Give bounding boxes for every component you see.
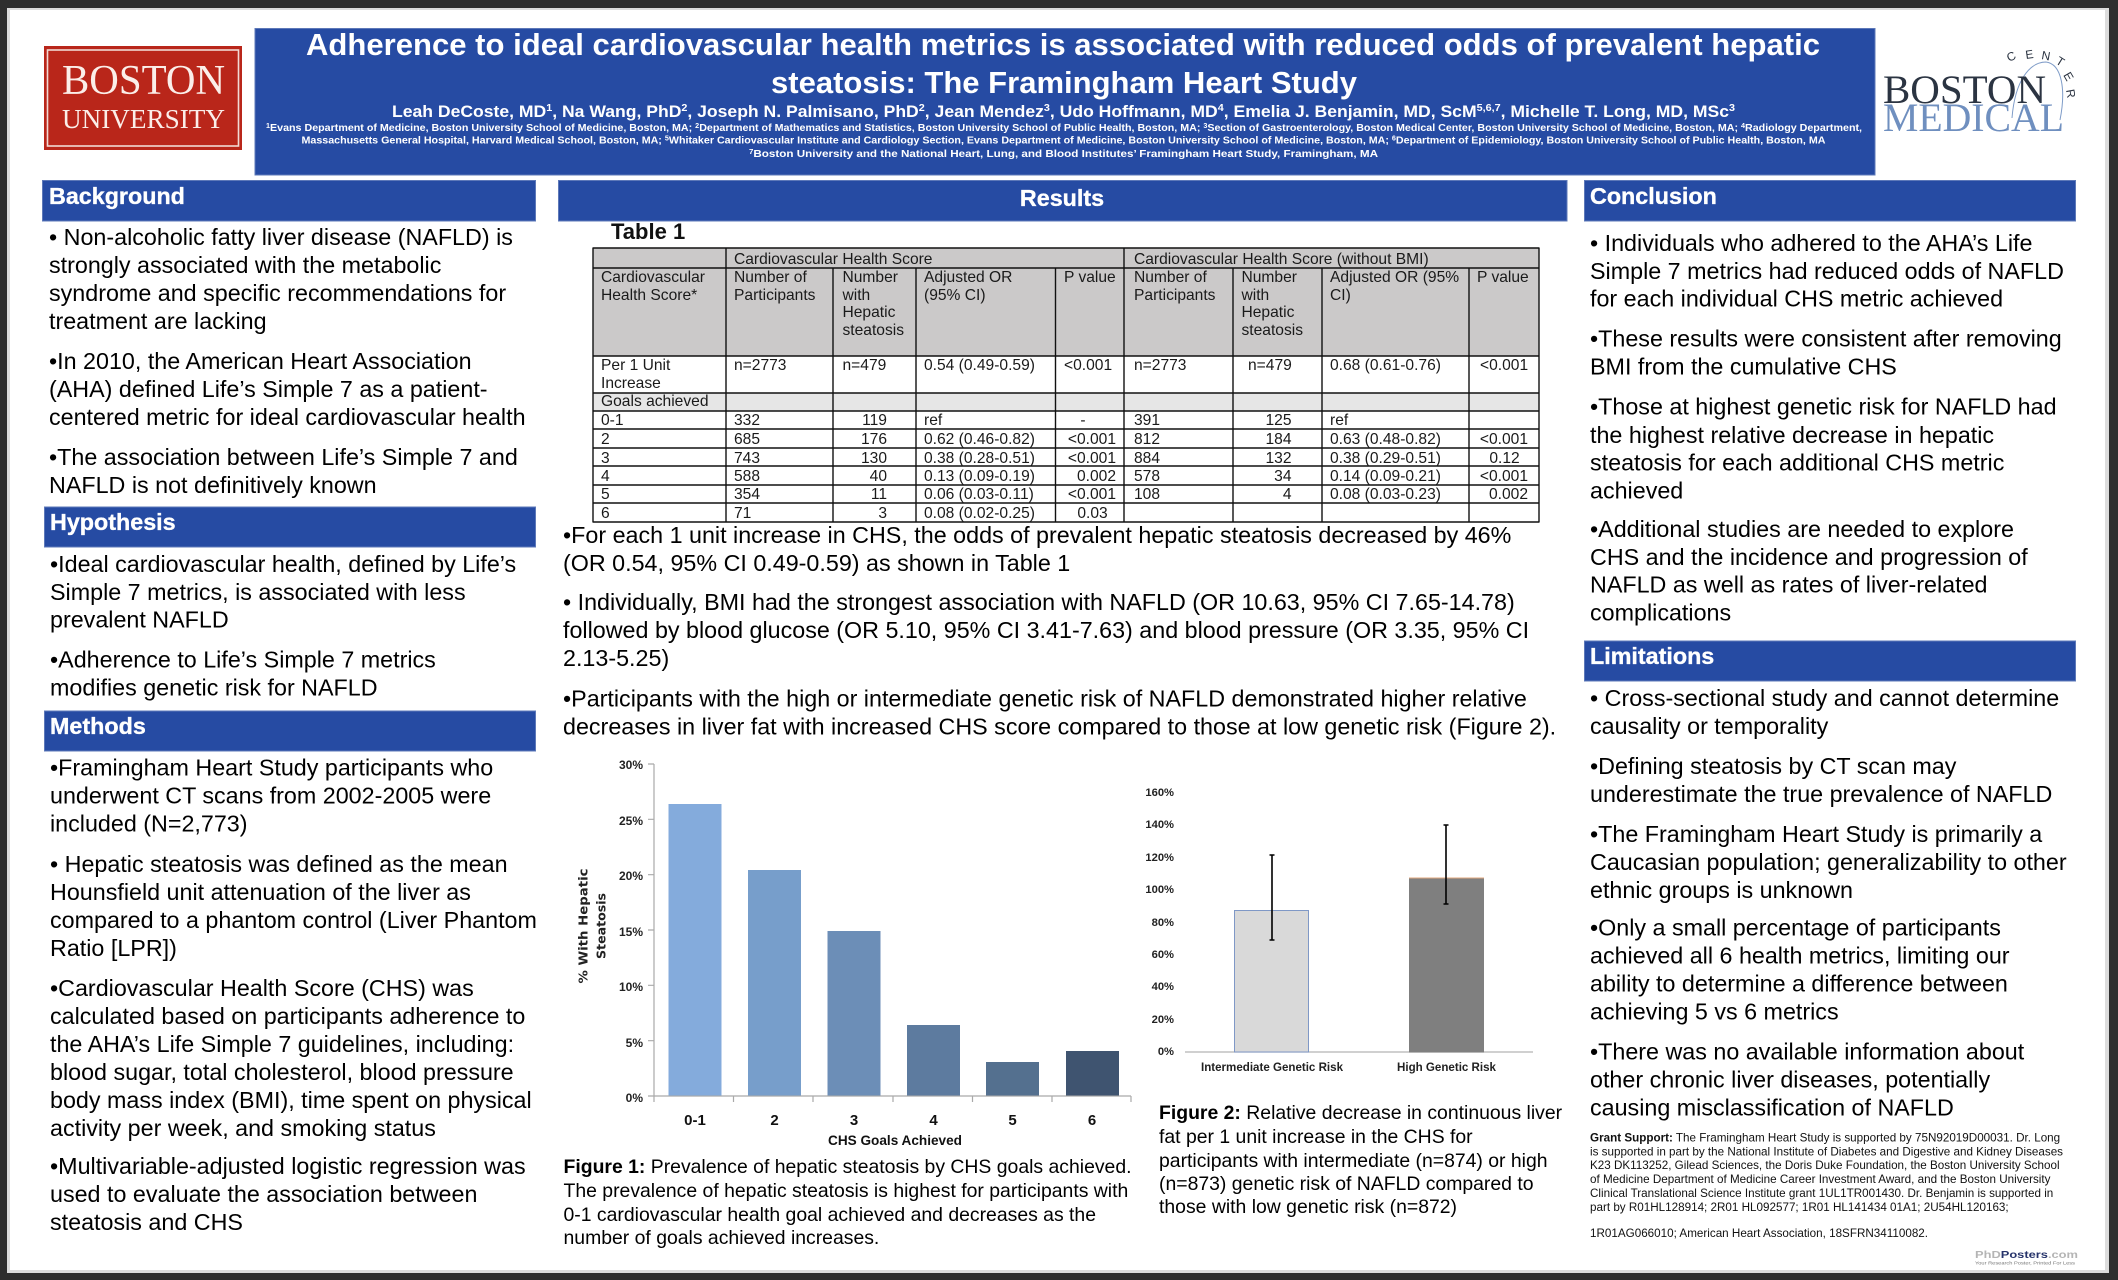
text block: results bullets: followed by blood glucose (OR 5.10, 95% CI 3.41-7.63) and blood pressure (OR 3.35, 95% CI — [563, 617, 1529, 643]
bar chart: figure 1: 2 — [770, 1112, 779, 1129]
table 1: Participants — [734, 287, 816, 304]
table 1: 0.54 (0.49-0.59) — [924, 357, 1035, 374]
text block: results bullets: 2.13-5.25) — [563, 645, 669, 671]
logo: Boston Medical Center — [1883, 47, 2078, 140]
text block: conclusion bullets: CHS and the incidence and progression of — [1590, 544, 2028, 570]
table 1: <0.001 — [1480, 431, 1528, 448]
table 1: 0.38 (0.28-0.51) — [924, 450, 1035, 467]
text block: conclusion bullets: •Those at highest genetic risk for NAFLD had — [1590, 394, 2057, 420]
text block: conclusion bullets: •These results were consistent after removing — [1590, 326, 2062, 352]
heading: hypothesis: Hypothesis — [50, 509, 176, 535]
panel: conclusion — [1584, 180, 2076, 626]
text block: conclusion bullets: the highest relative decrease in hepatic — [1590, 422, 1994, 448]
table 1: 743 — [734, 450, 760, 467]
text block: conclusion bullets: for each individual CHS metric achieved — [1590, 286, 2003, 312]
caption: figure 2: participants with intermediate (n=874) or high — [1159, 1150, 1548, 1172]
table 1: 176 — [861, 431, 887, 448]
table 1: <0.001 — [1068, 486, 1116, 503]
table 1: 0.08 (0.02-0.25) — [924, 505, 1035, 522]
text block: background bullets: • Non-alcoholic fatty liver disease (NAFLD) is — [49, 224, 513, 250]
caption: figure 1: 0-1 cardiovascular health goal achieved and decreases as the — [564, 1204, 1096, 1226]
logo: Boston Medical Center: CENTER — [2004, 47, 2078, 99]
affiliations: 6 — [1392, 136, 1396, 142]
caption: figure 1: The prevalence of hepatic steatosis is highest for participants with — [564, 1180, 1128, 1202]
text block: methods bullets: underwent CT scans from 2002-2005 were — [50, 782, 491, 808]
bar chart: figure 2: 140% — [1145, 819, 1174, 831]
text block: grant support: Grant Support: The Framingham Heart Study is supported by 75N92019D00031. Dr. Long — [1590, 1132, 2060, 1144]
authors: 3 — [1044, 103, 1050, 114]
text block: background bullets: treatment are lacking — [49, 308, 267, 334]
text block: background bullets: strongly associated with the metabolic — [49, 252, 442, 278]
table 1: with — [842, 287, 870, 304]
table 1: 184 — [1265, 431, 1292, 448]
logo: Boston Medical Center: BOSTON — [1883, 67, 2046, 112]
authors: 2 — [919, 103, 925, 114]
table 1: P value — [1477, 269, 1529, 286]
caption: figure 1 — [564, 1156, 1132, 1249]
heading: methods — [44, 711, 536, 751]
panel: results — [558, 180, 1567, 1249]
authors: Leah DeCoste, MD — [392, 103, 535, 121]
table 1: 0.002 — [1489, 486, 1528, 503]
text block: background bullets: syndrome and specific recommendations for — [49, 280, 506, 306]
heading: background — [42, 180, 536, 221]
text block: methods bullets: steatosis and CHS — [50, 1209, 243, 1235]
affiliations: Evans Department of Medicine, Boston University School of Medicine, Boston, MA; — [270, 123, 695, 134]
text block: results bullets — [563, 522, 1556, 740]
caption: figure 2: (n=873) genetic risk of NAFLD compared to — [1159, 1173, 1534, 1195]
table 1 — [592, 248, 1540, 522]
table 1: Number — [1242, 269, 1297, 286]
table 1: 588 — [734, 468, 760, 485]
table 1: Hepatic — [842, 304, 896, 321]
table 1: 0.62 (0.46-0.82) — [924, 431, 1035, 448]
table 1: 0.08 (0.03-0.23) — [1330, 486, 1441, 503]
table 1: steatosis — [1242, 322, 1303, 339]
text block: conclusion bullets: Simple 7 metrics had reduced odds of NAFLD — [1590, 258, 2064, 284]
bar chart: figure 2: 120% — [1145, 852, 1174, 864]
heading: results — [558, 180, 1567, 221]
table 1: 332 — [734, 412, 760, 429]
text block: background bullets — [49, 224, 526, 498]
table 1: <0.001 — [1480, 357, 1528, 374]
authors: 3 — [1729, 103, 1735, 114]
bar chart: figure 1: % With Hepatic — [576, 868, 590, 984]
heading: conclusion: Conclusion — [1590, 183, 1717, 209]
table 1: 0.13 (0.09-0.19) — [924, 468, 1035, 485]
text block: limitations bullets: •Only a small percentage of participants — [1590, 914, 2001, 940]
table 1: CI) — [1330, 287, 1351, 304]
text block: methods bullets: used to evaluate the association between — [50, 1181, 477, 1207]
bar chart: figure 2: 20% — [1152, 1014, 1174, 1026]
table 1: 391 — [1134, 412, 1160, 429]
caption: figure 2: those with low genetic risk (n=872) — [1159, 1196, 1457, 1218]
table 1: with — [1240, 287, 1269, 304]
table 1: 119 — [862, 412, 887, 429]
logo: PhDPosters: PhD Posters .com — [1975, 1250, 2078, 1261]
affiliations: 3 — [1203, 123, 1207, 130]
heading: background: Background — [49, 183, 185, 209]
table 1: 0.14 (0.09-0.21) — [1330, 468, 1441, 485]
text block: conclusion bullets: •Additional studies are needed to explore — [1590, 516, 2014, 542]
text block: methods bullets: •Multivariable-adjusted logistic regression was — [50, 1153, 526, 1179]
text block: grant support: Clinical Translational Science Institute grant 1UL1TR001430. Dr. Benjamin is supported in — [1590, 1187, 2053, 1200]
authors: , Udo Hoffmann, MD — [1050, 103, 1218, 121]
table 1: Goals achieved — [601, 393, 708, 410]
affiliations: Department of Epidemiology, Boston University School of Public Health, Boston, MA — [1396, 136, 1826, 146]
text block: methods bullets: blood sugar, total cholesterol, blood pressure — [50, 1059, 514, 1085]
affiliations: 2 — [695, 123, 699, 130]
table 1: n=2773 — [1134, 357, 1186, 374]
table 1: Cardiovascular Health Score (without BMI) — [1134, 251, 1429, 268]
text block: background bullets: NAFLD is not definitively known — [49, 472, 377, 498]
bar chart: figure 1: 20% — [619, 869, 643, 883]
table 1: Increase — [601, 375, 661, 392]
text block: methods bullets: activity per week, and smoking status — [50, 1115, 436, 1141]
table 1: 4 — [601, 468, 610, 485]
table 1: n=479 — [842, 357, 886, 374]
bar chart: figure 2: 100% — [1145, 884, 1174, 896]
table 1: ref — [924, 412, 943, 429]
bar chart: figure 1: 3 — [850, 1112, 858, 1129]
text block: conclusion bullets — [1590, 230, 2064, 626]
table 1: 5 — [601, 486, 610, 503]
bar chart: figure 1 — [576, 758, 1131, 1148]
table 1: Per 1 Unit — [601, 357, 671, 374]
bar chart: figure 2: 0% — [1158, 1046, 1174, 1058]
affiliations — [266, 123, 1862, 160]
table 1: <0.001 — [1068, 431, 1116, 448]
caption: figure 1: number of goals achieved increases. — [564, 1227, 879, 1249]
table 1: 0.06 (0.03-0.11) — [924, 486, 1034, 503]
text block: background bullets: centered metric for ideal cardiovascular health — [49, 404, 526, 430]
table 1: 71 — [734, 505, 751, 522]
table 1: Hepatic — [1242, 304, 1295, 321]
affiliations: Massachusetts General Hospital, Harvard Medical School, Boston, MA; — [302, 136, 652, 146]
affiliations: 4 — [1741, 123, 1745, 130]
table 1: 3 — [878, 505, 887, 522]
table 1: 812 — [1134, 431, 1160, 448]
text block: methods bullets: •Framingham Heart Study participants who — [50, 754, 493, 780]
table 1: steatosis — [842, 322, 904, 339]
table 1: 0-1 — [601, 412, 624, 429]
text block: methods bullets: compared to a phantom control (Liver Phantom — [50, 907, 537, 933]
text block: grant support: of Medicine Department of Medicine Career Investment Award, and the Boston University — [1590, 1173, 2051, 1186]
affiliations: 1 — [266, 123, 270, 130]
table 1: 130 — [861, 450, 887, 467]
text block: hypothesis bullets: modifies genetic risk for NAFLD — [50, 674, 378, 700]
logo: Boston University: UNIVERSITY — [62, 104, 225, 134]
text block: methods bullets: calculated based on participants adherence to — [50, 1003, 525, 1029]
table 1: 6 — [601, 505, 610, 522]
bar chart: figure 1: 0-1 — [684, 1112, 706, 1129]
table title: Table 1 — [611, 219, 685, 244]
text block: grant support: K23 DK113252, Gilead Sciences, the Doris Duke Foundation, the Boston University School — [1590, 1159, 2060, 1172]
table 1: 108 — [1134, 486, 1160, 503]
table 1: <0.001 — [1064, 357, 1112, 374]
panel: left column — [42, 180, 537, 1235]
text block: limitations bullets: achieved all 6 health metrics, limiting our — [1590, 942, 2010, 968]
bar chart: figure 2: Intermediate Genetic Risk — [1201, 1062, 1344, 1074]
table 1: Number of — [1134, 269, 1207, 286]
affiliations: 5 — [665, 136, 669, 142]
bar chart: figure 1: 25% — [619, 814, 643, 828]
poster title — [306, 27, 1820, 100]
text block: limitations bullets: •There was no available information about — [1590, 1038, 2025, 1064]
table 1: 354 — [734, 486, 760, 503]
text block: limitations bullets: Caucasian population; generalizability to other — [1590, 849, 2067, 875]
panel: methods — [44, 711, 537, 1235]
text block: results bullets: •For each 1 unit increase in CHS, the odds of prevalent hepatic steatosis decreased by 46% — [563, 522, 1511, 548]
text block: limitations bullets: ability to determine a difference between — [1590, 970, 2008, 996]
bar chart: figure 1: 6 — [1088, 1112, 1096, 1129]
poster title: steatosis: The Framingham Heart Study — [771, 65, 1358, 100]
bar chart: figure 1: 15% — [619, 925, 643, 939]
text block: conclusion bullets: complications — [1590, 600, 1731, 626]
panel: background — [42, 180, 536, 498]
title banner — [255, 27, 1875, 175]
panel: hypothesis — [44, 507, 536, 700]
text block: background bullets: •In 2010, the American Heart Association — [49, 348, 472, 374]
heading: methods: Methods — [50, 713, 146, 739]
bar chart: figure 1: 4 — [929, 1112, 938, 1129]
authors: , Michelle T. Long, MD, MSc — [1501, 103, 1729, 121]
table 1: 2 — [601, 431, 610, 448]
table 1: Participants — [1134, 287, 1216, 304]
table 1: 685 — [734, 431, 760, 448]
authors: , Joseph N. Palmisano, PhD — [687, 103, 919, 121]
table 1: 884 — [1134, 450, 1160, 467]
text block: limitations bullets: other chronic liver diseases, potentially — [1590, 1066, 1990, 1092]
table 1: 125 — [1265, 412, 1292, 429]
text block: limitations bullets: underestimate the true prevalence of NAFLD — [1590, 781, 2052, 807]
text block: limitations bullets — [1590, 685, 2067, 1120]
caption: figure 1: Figure 1: Prevalence of hepatic steatosis by CHS goals achieved. — [564, 1156, 1132, 1178]
bar chart: figure 2: 160% — [1145, 787, 1174, 799]
text block: results bullets: •Participants with the high or intermediate genetic risk of NAFLD demonstrated higher relative — [563, 686, 1527, 712]
panel: limitations — [1584, 641, 2076, 1120]
table 1: n=479 — [1248, 357, 1292, 374]
text block: conclusion bullets: • Individuals who adhered to the AHA’s Life — [1590, 230, 2032, 256]
text block: methods bullets: Hounsfield unit attenuation of the liver as — [50, 879, 471, 905]
text block: hypothesis bullets: •Ideal cardiovascular health, defined by Life’s — [50, 551, 516, 577]
text block: limitations bullets: achieving 5 vs 6 metrics — [1590, 998, 1839, 1024]
table 1: Number of — [734, 269, 807, 286]
text block: background bullets: (AHA) defined Life’s Simple 7 as a patient- — [49, 376, 488, 402]
table 1: 578 — [1134, 468, 1160, 485]
text block: results bullets: (OR 0.54, 95% CI 0.49-0.59) as shown in Table 1 — [563, 550, 1070, 576]
logo: Boston University: BOSTON — [62, 58, 225, 104]
affiliations: 7 — [749, 149, 753, 156]
panel: right column — [1584, 180, 2076, 1240]
affiliations: Radiology Department, — [1745, 123, 1862, 134]
affiliations: Whitaker Cardiovascular Institute and Cardiology Section, Evans Department of Medicine, Boston University School of Medicine, Boston, MA; — [669, 136, 1392, 146]
authors: 4 — [1218, 103, 1224, 114]
text block: grant support — [1590, 1132, 2063, 1240]
logo: Boston Medical Center: MEDICAL — [1883, 95, 2064, 140]
text block: limitations bullets: causality or temporality — [1590, 713, 1829, 739]
bar chart: figure 1: 5% — [626, 1036, 643, 1050]
text block: conclusion bullets: steatosis for each additional CHS metric — [1590, 450, 2005, 476]
text block: methods bullets: •Cardiovascular Health Score (CHS) was — [50, 975, 474, 1001]
caption: figure 2: fat per 1 unit increase in the CHS for — [1159, 1126, 1473, 1148]
authors: 1 — [546, 103, 553, 114]
authors: , Jean Mendez — [925, 103, 1044, 121]
table 1: <0.001 — [1480, 468, 1528, 485]
heading: limitations — [1584, 641, 2076, 681]
table 1: Cardiovascular Health Score — [734, 251, 932, 268]
table 1: - — [1080, 412, 1086, 429]
authors: , Na Wang, PhD — [552, 103, 682, 121]
table 1: 0.03 — [1077, 505, 1108, 522]
caption: figure 2: Figure 2: Relative decrease in continuous liver — [1159, 1102, 1563, 1124]
text block: results bullets: decreases in liver fat with increased CHS score compared to those at low genetic risk (Figure 2). — [563, 714, 1556, 740]
table 1: <0.001 — [1068, 450, 1116, 467]
text block: grant support: part by R01HL128914; 2R01 HL092577; 1R01 HL141434 01A1; 2U54HL120163; — [1590, 1201, 2009, 1214]
text block: methods bullets: the AHA’s Life Simple 7 guidelines, including: — [50, 1031, 514, 1057]
poster title: Adherence to ideal cardiovascular health metrics is associated with reduced odds of prevalent hepatic — [306, 27, 1820, 62]
text block: conclusion bullets: NAFLD as well as rates of liver-related — [1590, 572, 1987, 598]
caption: figure 2 — [1159, 1102, 1563, 1218]
text block: limitations bullets: •Defining steatosis by CT scan may — [1590, 753, 1957, 779]
text block: background bullets: •The association between Life’s Simple 7 and — [49, 444, 518, 470]
text block: results bullets: • Individually, BMI had the strongest association with NAFLD (OR 10.63, 95% CI 7.65-14.78) — [563, 589, 1515, 615]
text block: methods bullets: • Hepatic steatosis was defined as the mean — [50, 851, 508, 877]
table 1: 0.63 (0.48-0.82) — [1330, 431, 1441, 448]
table 1: Cardiovascular — [601, 269, 705, 286]
text block: hypothesis bullets: prevalent NAFLD — [50, 606, 229, 632]
bar chart: figure 2: 40% — [1152, 981, 1174, 993]
text block: limitations bullets: • Cross-sectional study and cannot determine — [1590, 685, 2059, 711]
text block: methods bullets: included (N=2,773) — [50, 810, 248, 836]
text block: limitations bullets: causing misclassification of NAFLD — [1590, 1094, 1954, 1120]
table 1: 40 — [870, 468, 887, 485]
text block: hypothesis bullets: •Adherence to Life’s Simple 7 metrics — [50, 646, 436, 672]
bar chart: figure 2: High Genetic Risk — [1397, 1062, 1497, 1074]
heading: results: Results — [1020, 185, 1104, 211]
table 1: 3 — [601, 450, 610, 467]
table 1: 132 — [1265, 450, 1292, 467]
table 1: 4 — [1283, 486, 1292, 503]
bar chart: figure 1: Steatosis — [594, 893, 608, 959]
text block: limitations bullets: •The Framingham Heart Study is primarily a — [1590, 821, 2042, 847]
text block: conclusion bullets: achieved — [1590, 478, 1683, 504]
text block: methods bullets — [50, 754, 537, 1235]
bar chart: figure 2: 80% — [1152, 917, 1174, 929]
affiliations: Section of Gastroenterology, Boston Medical Center, Boston University School of Medicine, Boston, MA; — [1207, 123, 1741, 134]
authors: 2 — [681, 103, 688, 114]
heading: limitations: Limitations — [1590, 643, 1714, 669]
affiliations: Boston University and the National Heart, Lung, and Blood Institutes’ Framingham Heart Study, Framingham, MA — [753, 149, 1379, 160]
table 1: 0.002 — [1077, 468, 1116, 485]
bar chart: figure 1: 0% — [626, 1091, 643, 1105]
table 1: Adjusted OR — [924, 269, 1012, 286]
bar chart: figure 2 — [1145, 787, 1533, 1074]
table 1: Health Score* — [601, 287, 697, 304]
bar chart: figure 1: CHS Goals Achieved — [828, 1132, 962, 1148]
text block: methods bullets: body mass index (BMI), time spent on physical — [50, 1087, 532, 1113]
authors: 5,6,7 — [1477, 103, 1501, 114]
table 1: 0.68 (0.61-0.76) — [1330, 357, 1441, 374]
bar chart: figure 1: 10% — [619, 980, 643, 994]
text block: hypothesis bullets: Simple 7 metrics, is associated with less — [50, 579, 466, 605]
heading: conclusion — [1584, 180, 2076, 221]
bar chart: figure 2: 60% — [1152, 949, 1174, 961]
table 1: 34 — [1274, 468, 1292, 485]
table 1: Number — [842, 269, 898, 286]
table 1: 0.38 (0.29-0.51) — [1330, 450, 1441, 467]
logo: PhDPosters: Your Research Poster, Printed For Less — [1975, 1260, 2076, 1266]
text block: grant support: is supported in part by the National Institute of Diabetes and Digestive and Kidney Diseases — [1590, 1146, 2063, 1158]
table 1: 11 — [871, 486, 887, 503]
table 1: n=2773 — [734, 357, 786, 374]
table 1: P value — [1064, 269, 1116, 286]
table 1: ref — [1330, 412, 1349, 429]
text block: limitations bullets: ethnic groups is unknown — [1590, 877, 1853, 903]
table 1: 0.12 — [1489, 450, 1520, 467]
text block: grant support: 1R01AG066010; American Heart Association, 18SFRN34110082. — [1590, 1227, 1928, 1240]
text block: conclusion bullets: BMI from the cumulative CHS — [1590, 354, 1897, 380]
logo: Boston University — [44, 46, 242, 150]
bar chart: figure 1: 5 — [1008, 1112, 1017, 1129]
affiliations: Department of Mathematics and Statistics, Boston University School of Public Health, Boston, MA; — [699, 123, 1203, 134]
text block: methods bullets: Ratio [LPR]) — [50, 935, 177, 961]
text block: hypothesis bullets — [50, 551, 516, 700]
table 1: (95% CI) — [924, 287, 986, 304]
bar chart: figure 1: 30% — [619, 758, 643, 772]
heading: hypothesis — [44, 507, 536, 547]
table 1: Adjusted OR (95% — [1330, 269, 1459, 286]
logo: PhDPosters — [1975, 1250, 2078, 1266]
authors: , Emelia J. Benjamin, MD, ScM — [1224, 103, 1477, 121]
